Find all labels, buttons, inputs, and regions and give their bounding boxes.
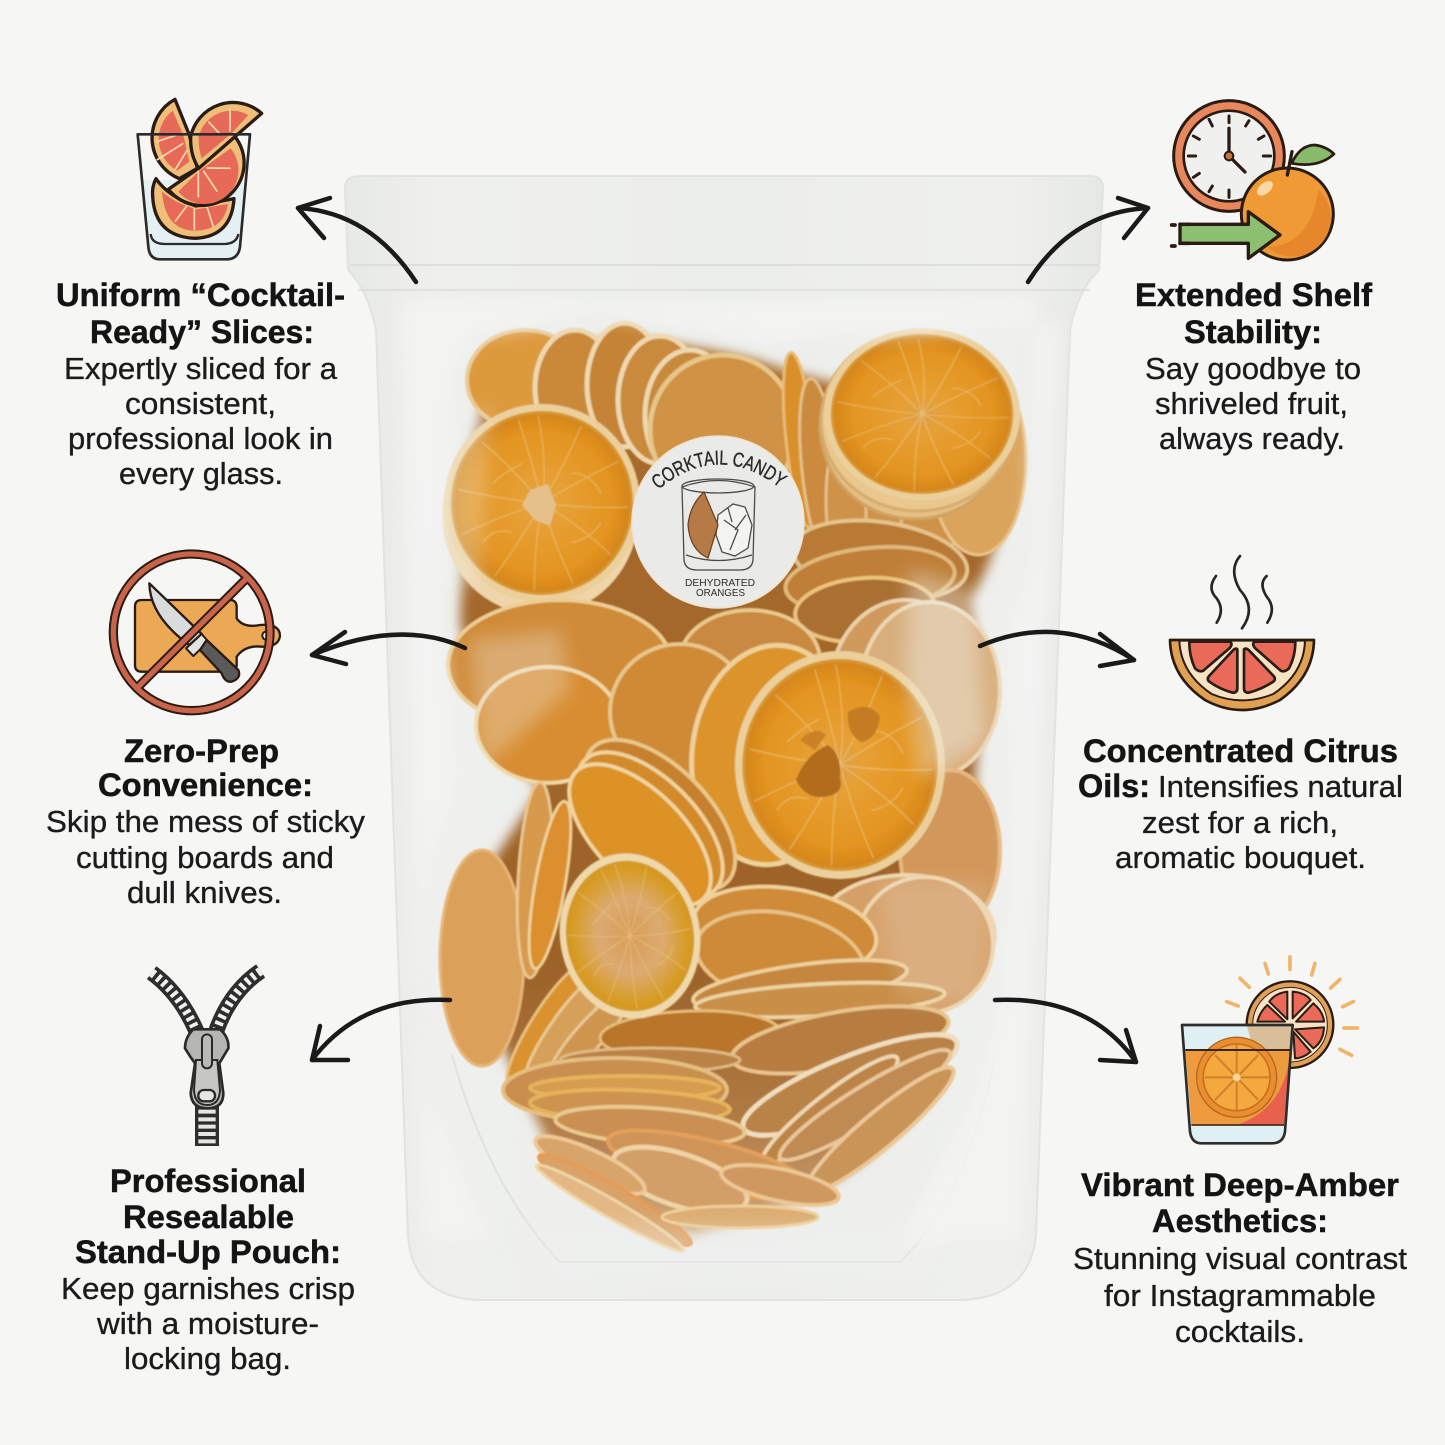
panel: zero-prep (46, 554, 365, 910)
arrow: to citrus oils (980, 632, 1134, 666)
big front slice (735, 651, 945, 879)
body text: Stunning visual contrast (1073, 1241, 1407, 1276)
body text: professional look in (68, 421, 333, 456)
lower-left fan (497, 960, 593, 1090)
heading: Professional (110, 1163, 306, 1199)
bottom left flat stack (503, 1058, 727, 1122)
heading (1081, 1167, 1399, 1239)
icon: clock, orange and arrow (1172, 101, 1334, 260)
body text (1145, 351, 1361, 456)
product photo: stand-up pouch with dried orange slices (344, 175, 1104, 1301)
body text: with a moisture- (96, 1306, 319, 1341)
body text: cocktails. (1175, 1314, 1305, 1349)
body text: cutting boards and (76, 840, 334, 875)
heading: Resealable (123, 1199, 294, 1235)
heading: Uniform “Cocktail- (56, 277, 345, 313)
heading: Stand-Up Pouch: (75, 1234, 341, 1270)
dark backing of the fruit pile (460, 340, 1005, 1235)
icon: amber cocktail with citrus garnish (1182, 957, 1357, 1143)
icon: zipper (152, 971, 261, 1146)
body text: shriveled fruit, (1155, 386, 1348, 421)
body text (61, 1271, 355, 1376)
heading and body text: Oils: (1078, 768, 1150, 804)
heading and body text: aromatic bouquet. (1115, 840, 1366, 875)
pouch body (345, 176, 1103, 1300)
icon: grapefruit wedges in glass (138, 99, 262, 259)
heading and body text: Intensifies natural (1158, 769, 1403, 804)
heading and body text: Concentrated Citrus (1083, 733, 1398, 769)
body text: Keep garnishes crisp (61, 1271, 355, 1306)
body text: locking bag. (124, 1341, 291, 1376)
heading: Stability: (1184, 314, 1322, 350)
product descriptor (685, 577, 755, 599)
dark blotches of big slice (796, 745, 841, 797)
lower right back slices (815, 875, 995, 995)
arrow: to uniform slices (298, 198, 416, 282)
body text (64, 351, 338, 491)
arrow: to shelf stability (1028, 198, 1148, 282)
brand name: CORKTAIL CANDY (652, 450, 788, 488)
body text: for Instagrammable (1104, 1278, 1376, 1313)
heading: Extended Shelf (1135, 277, 1372, 313)
body text (1073, 1241, 1407, 1349)
heading and body text: zest for a rich, (1142, 805, 1338, 840)
product label sticker (631, 435, 805, 609)
body text: consistent, (125, 386, 276, 421)
body text (46, 804, 365, 910)
left edge slices (440, 850, 524, 1066)
bottom right tilted slices (753, 1045, 907, 1175)
heading (75, 1163, 341, 1270)
body text: always ready. (1159, 421, 1345, 456)
panel: uniform slices (56, 99, 345, 491)
middle flat stacks (688, 876, 882, 984)
pouch glare reflections (400, 300, 1060, 1285)
bottom loose slices (602, 1116, 818, 1214)
small front slice (547, 842, 713, 1030)
rocks glass illustration (682, 479, 755, 570)
left large slice (442, 415, 638, 615)
heading (1135, 277, 1372, 350)
heading: Vibrant Deep-Amber (1081, 1167, 1399, 1203)
body text: dull knives. (127, 875, 282, 910)
body text: Expertly sliced for a (64, 351, 338, 386)
arrow: to zero-prep (312, 632, 465, 664)
heading: Ready” Slices: (90, 314, 314, 350)
heading: Convenience: (98, 767, 313, 803)
pouch seal lines (350, 265, 1098, 1262)
middle slices (448, 600, 672, 730)
icon: steaming grapefruit wedge (1170, 556, 1314, 710)
product descriptor: DEHYDRATED (685, 577, 755, 589)
icon: crossed-out knife and board (113, 554, 280, 711)
heading: Aesthetics: (1152, 1203, 1328, 1239)
arrow: to pouch (312, 1000, 450, 1060)
pale centre of left slice (522, 484, 556, 526)
right mid stack (788, 510, 972, 610)
tilted fan of slices (559, 714, 761, 916)
heading (56, 277, 345, 350)
heading and body text (1078, 733, 1403, 875)
body text: Skip the mess of sticky (46, 804, 365, 839)
heading: Zero-Prep (124, 733, 279, 769)
body text: every glass. (119, 456, 283, 491)
back top-left slices (467, 330, 583, 430)
top-right slice with rims (820, 335, 1010, 519)
panel: amber aesthetics (1073, 957, 1407, 1349)
panel: resealable pouch (61, 971, 355, 1376)
heading (98, 733, 313, 803)
product descriptor: ORANGES (696, 587, 745, 599)
pile of dried orange slices (440, 323, 1026, 1258)
body text: Say goodbye to (1145, 351, 1361, 386)
arrow: to aesthetics (995, 1000, 1136, 1062)
panel: citrus oils (1078, 556, 1403, 875)
standing edge slices (777, 351, 823, 529)
panel: shelf stability (1135, 101, 1372, 456)
